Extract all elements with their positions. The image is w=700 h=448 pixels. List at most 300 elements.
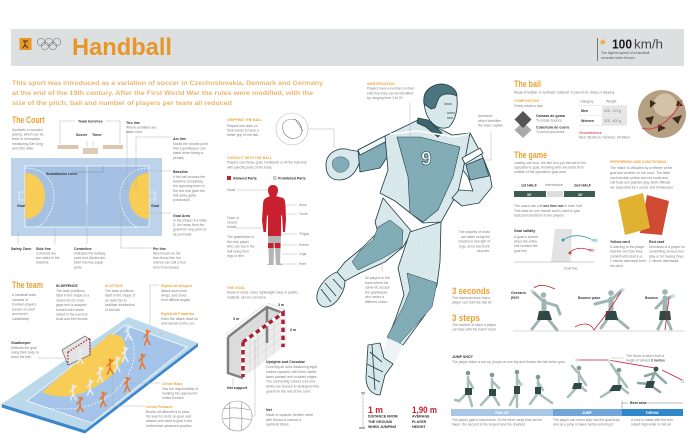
body labels: Head: [227, 188, 235, 192]
ball trajectory: The throw is taken from a: [626, 354, 664, 358]
in defence: formed with hands: [56, 308, 84, 312]
team labels: Right/Left Wingers: [161, 284, 192, 288]
goal validity: Goal validity: [514, 229, 535, 233]
ball illustration: [638, 90, 686, 138]
court labels: Centreline: [74, 247, 92, 251]
right arm with armband: [452, 133, 492, 206]
gripping the ball text: their hands to have a: [227, 129, 259, 133]
card descriptions: Dismissal of a player for: [649, 245, 686, 249]
game description: Lasting one hour, the aim is to put the ball in the: [514, 161, 586, 165]
card descriptions: play or for having three: [649, 254, 684, 258]
match timeline: [514, 183, 595, 197]
in attack: facilitate distribution: [105, 303, 135, 307]
team labels: Attack down both: [161, 289, 187, 293]
team labels: attacks with back to goal in the: [146, 419, 192, 423]
height stats: 1 m: [368, 405, 383, 416]
body labels: Legs: [299, 252, 307, 256]
body labels: the only player: [227, 240, 250, 244]
ball arm and hand: [326, 136, 392, 180]
in defence: raised in the event of: [56, 312, 88, 316]
court labels: stand when facing a: [173, 151, 203, 155]
phase captions: The player can never step into the goal area,: [553, 418, 620, 422]
goal labels: faces painted and rounded edges.: [266, 375, 317, 379]
card descriptions: [610, 240, 686, 268]
team benches and scorer table: Team benches: [78, 120, 103, 124]
best area marker: Best area: [630, 401, 647, 405]
identification: IDENTIFICATION: [367, 82, 395, 86]
composition: Cobertura de cuero: [536, 126, 570, 130]
goal validity: NO: [589, 248, 594, 252]
jump shot figures: [455, 364, 666, 407]
goal illustration: 3 m: [233, 317, 239, 321]
court labels: the one that gave the: [173, 189, 205, 193]
court labels: pitch into two equal: [74, 261, 103, 265]
court labels: point and divides the: [74, 256, 105, 260]
in defence: itself in the shape of a: [56, 294, 89, 298]
panel: three seconds and three steps: The maximum time that a: [452, 296, 490, 300]
weight table: 425 - 475 g: [604, 109, 621, 113]
team labels: the way for shots on goal, and: [146, 415, 191, 419]
team description: (seven on court: [12, 307, 35, 311]
weight table: 325 - 400 g: [604, 119, 621, 123]
game heading: The game: [514, 150, 547, 160]
body diagram: [262, 185, 286, 265]
contact with the ball text: [227, 156, 307, 169]
panel: the ball: [514, 79, 686, 140]
court labels: Arc line: [173, 137, 186, 141]
team benches and scorer table: Timer: [92, 133, 102, 137]
refereeing and sanctioning: The match is officiated by a referee at the: [610, 166, 672, 170]
court labels: Marks the closest point: [173, 142, 208, 146]
goal labels: Uprights and Crossbar: [266, 360, 306, 364]
panel: the team: [2, 280, 198, 434]
refereeing and sanctioning: are supported by a scorer and timekeeper.: [610, 186, 674, 190]
kit note: who wears a: [365, 295, 384, 299]
composition: Finely made to last: [514, 104, 543, 108]
intro paragraph: This sport was introduced as a variation of soccer in Czechoslovakia, Denmark and Germany: [12, 80, 324, 87]
court labels: goal from any point on: [173, 228, 207, 232]
composition: Camara de goma: [536, 114, 566, 118]
goal illustration: [225, 303, 296, 378]
speed stat: The highest speed of a handball: [601, 51, 650, 55]
bounce: [645, 289, 675, 330]
in defence: [56, 284, 89, 321]
phase captions: raised high while in mid air: [631, 422, 672, 426]
ball heading: The ball: [514, 79, 541, 89]
goal illustration: 3 m: [278, 303, 284, 307]
court labels: Where penalties are: [126, 126, 156, 130]
panel: passes: [511, 285, 684, 331]
team labels: Right/Left Fowardor: [161, 312, 195, 316]
right leg and shoe: [366, 222, 441, 395]
composition: [514, 99, 570, 138]
attackers: [77, 330, 150, 412]
court description: and 20m wide: [12, 146, 33, 150]
team labels: block the ball.: [11, 355, 32, 359]
kit note: same kit, accept: [365, 286, 390, 290]
phase bars: [451, 409, 683, 416]
net detail circle: [222, 401, 252, 431]
goal validity: Goal line: [564, 266, 577, 270]
bounce: Bounce: [645, 296, 658, 300]
ball description: Made of leather or synthetic material. It cannot be sticky or slippery.: [514, 90, 615, 94]
goal labels: Net: [266, 408, 273, 412]
goal labels: synthetic fibres: [266, 423, 289, 427]
overarm pass: Overarm: [511, 291, 526, 295]
in defence: gaps and is adapted: [56, 303, 87, 307]
body labels: legs or feet.: [227, 254, 245, 258]
phase captions: [452, 418, 673, 426]
court labels: Tiro line: [126, 121, 140, 125]
contact with the ball text: Players can throw, grab, hold/push or hit the ball only: [227, 160, 307, 164]
court labels: Indicates the halfway: [74, 252, 106, 256]
body labels: ball using their: [227, 249, 250, 253]
shots note: are taken using the: [461, 235, 490, 239]
kit note: team where the: [365, 281, 388, 285]
team benches and scorer table: Scorer: [76, 133, 88, 137]
goal labels: with thread of natural or: [266, 418, 302, 422]
goal labels: metres squared, with three visible: [266, 370, 317, 374]
match timeline: 1st HALF: [521, 184, 538, 188]
goal illustration: 2 m: [290, 328, 296, 332]
card descriptions: that the next foul they: [610, 250, 643, 254]
court labels: Safety Zone: [11, 247, 31, 251]
overarm pass: pass: [511, 296, 519, 300]
team labels: from difficult angles.: [161, 298, 191, 302]
refereeing and sanctioning: REFEREEING AND SANCTIONING: [610, 160, 667, 164]
height stats: 1,90 m: [412, 405, 437, 416]
goal validity: when the entire: [514, 240, 537, 244]
weight table: Men: [581, 109, 588, 113]
identification: [367, 82, 415, 100]
ball trajectory: height of almost 3 metres: [626, 359, 665, 363]
circumference: [579, 131, 630, 140]
team description: fourteen players: [12, 303, 37, 307]
in defence: IN DEFENCE: [56, 284, 78, 288]
in attack: of the ball.: [105, 308, 121, 312]
kit note: the goalkeeper: [365, 290, 388, 294]
court labels: taken from.: [126, 130, 143, 134]
circumference: Men: 58-60cm / Women: 54-56cm: [579, 136, 630, 140]
court labels: If the ball crosses the: [173, 175, 205, 179]
contact with the ball text: CONTACT WITH THE BALL: [227, 156, 273, 160]
heading: the team: The team: [12, 280, 43, 290]
runner 1: [455, 371, 473, 406]
goal labels: The contrasting colours (red and: [266, 380, 315, 384]
card descriptions: Yellow card: [610, 240, 630, 244]
panel: three seconds and three steps: can take with the ball in hand: [452, 328, 496, 332]
bounce pass: Bounce pass: [578, 296, 600, 300]
team labels: Centre Back: [162, 382, 182, 386]
court labels: Pin line: [153, 247, 166, 251]
height stats: [359, 393, 437, 429]
weight table: Women: [581, 119, 594, 123]
runner 4: [530, 375, 552, 404]
speed stat: 100: [612, 38, 632, 52]
refereeing and sanctioning: goal and another on the court. The latter: [610, 171, 671, 175]
phase bars: THROW: [645, 411, 659, 415]
phase captions: taken, the second is the longest and the shortest: [452, 422, 525, 426]
intro paragraph: [12, 80, 324, 107]
intro paragraph: size of the pitch, ball and number of players per team all reduced: [12, 100, 232, 107]
court labels: that a goalkeeper can: [173, 147, 206, 151]
kit note: different colour.: [365, 300, 388, 304]
height stats: THE GROUND: [368, 420, 393, 424]
identification: by, ranging from 1 to 20.: [367, 96, 404, 100]
gripping the ball text: Players use resin on: [227, 124, 258, 128]
game description: opposition's goal, throwing with one hand from: [514, 166, 584, 170]
title: Handball: [72, 34, 172, 61]
court labels: penalty: [173, 156, 184, 160]
panel: the goal: [222, 286, 319, 431]
body labels: who can touch the: [227, 245, 255, 249]
court labels: baseline: [36, 261, 49, 265]
jump shot text: JUMP SHOT: [452, 355, 474, 359]
shots note: muscles.: [477, 249, 490, 253]
phase bars: JUMP: [582, 411, 593, 415]
panel: three seconds and three steps: 3 seconds: [452, 286, 490, 296]
speed stat: [597, 36, 663, 61]
body labels: Arms: [299, 203, 307, 207]
court description: measuring 40m long: [12, 142, 43, 146]
body labels: Thighs: [299, 232, 309, 236]
court labels: possession.: [173, 198, 191, 202]
body labels: hands: [227, 225, 237, 229]
player annotations: [365, 82, 504, 304]
intro paragraph: at the end of the 19th century. After the First World War the rules were modified, with the: [12, 90, 314, 97]
team court diagram: [2, 317, 198, 434]
card descriptions: 2 minute dismissal from: [610, 259, 646, 263]
card descriptions: A warning to the player: [610, 245, 645, 249]
game description: outside of the opposition goal area: [514, 170, 566, 174]
gripping the ball text: [227, 118, 263, 137]
goal on team court: [62, 336, 90, 365]
body labels: Trunk: [299, 212, 308, 216]
in defence: fouls and free throws: [56, 317, 88, 321]
height stats: WHEN JUMPING: [368, 425, 397, 429]
team labels: Centre Forward: [146, 405, 172, 409]
team benches and scorer table: [58, 120, 123, 154]
in defence: The team positions: [56, 289, 85, 293]
legend: [227, 176, 306, 180]
body labels: [227, 188, 309, 266]
in attack: IN ATTACK: [105, 284, 124, 288]
overarm pass: [511, 285, 560, 330]
court diagram: Substitution Lines: [46, 172, 77, 176]
goal validity: [514, 229, 597, 270]
panel: the game: [514, 150, 686, 270]
court labels: referee can call a foul: [153, 261, 186, 265]
refereeing and sanctioning: [610, 160, 674, 190]
team description: A handball team: [12, 293, 36, 297]
match timeline: 30': [527, 193, 532, 197]
thrower: [638, 367, 666, 392]
team labels: using their body to: [11, 351, 39, 355]
jump shot text: [452, 355, 566, 364]
goal validity: YES: [591, 238, 597, 242]
time out: tactical instructions to the players.: [514, 214, 565, 218]
court description: paving, which can be: [12, 133, 44, 137]
card descriptions: commit will result in a: [610, 254, 642, 258]
time out: The coach can call one time out in each half.: [514, 204, 583, 208]
team labels: wings, and shoot: [161, 294, 187, 298]
left leg and shoe: [317, 198, 412, 307]
body labels: Feet: [299, 262, 306, 266]
jumper 1: [568, 366, 586, 397]
best area marker: [622, 401, 683, 409]
panel: three seconds and three steps: [452, 286, 497, 332]
card descriptions: the pitch.: [610, 264, 624, 268]
kit note: All players in the: [365, 276, 390, 280]
team labels: Goalkeeper: [11, 341, 31, 345]
bounce pass: [575, 288, 628, 330]
court labels: Connects the: [36, 252, 56, 256]
height stats: DISTANCE FROM: [368, 414, 398, 418]
player illustration: [317, 84, 492, 395]
court labels: D, 6m away from the: [173, 223, 204, 227]
court labels: [11, 121, 208, 269]
gripping the ball text: GRIPPING THE BALL: [227, 118, 263, 122]
panel: three seconds and three steps: The number of steps a player: [452, 323, 497, 327]
court labels: its perimeter.: [173, 232, 193, 236]
goal labels: goal from the rest of the court.: [266, 390, 311, 394]
height stats: HEIGHT: [412, 425, 426, 429]
panel: jump shot: [451, 354, 684, 426]
identification: shirt that they can be identified: [367, 91, 413, 95]
team labels: furthermost advanced position.: [146, 424, 192, 428]
team labels: Enter the attack head on: [161, 317, 198, 321]
court labels: the opposing team to: [173, 184, 205, 188]
team labels: Has the responsibility of: [162, 387, 198, 391]
panel: three seconds and three steps: player can hold the ball for: [452, 301, 493, 305]
card descriptions: Red card: [649, 240, 664, 244]
legend: Allowed Parts: [233, 176, 257, 180]
heading: the court: The Court: [12, 115, 44, 125]
phase captions: and as a jump is taken before entering it: [553, 422, 613, 426]
armband: Armband,: [478, 114, 493, 118]
in attack: itself in the shape of: [105, 294, 135, 298]
icon: handball pictogram: [20, 38, 32, 50]
court diagram: Goal: [17, 204, 25, 208]
defenders: [70, 325, 131, 400]
goal labels: Covering an area measuring eight: [266, 365, 317, 369]
team description: substitutes): [12, 317, 29, 321]
card descriptions: 2 minute dismissals: [649, 259, 679, 263]
body labels: closed: [227, 220, 237, 224]
team labels: and unload on the run.: [161, 322, 195, 326]
court labels: baseline completely,: [173, 180, 204, 184]
team labels: centre forward: [162, 396, 184, 400]
goal validity: goal line.: [514, 249, 528, 253]
runner 3: [510, 370, 524, 407]
court labels: Side line: [36, 247, 51, 251]
team description: and seven: [12, 312, 28, 316]
phase bars: RUN UP: [495, 411, 509, 415]
identification: Players have a number on their: [367, 86, 415, 90]
in defence: closed fan to cover: [56, 298, 85, 302]
goal labels: Made of squared, flexible mesh: [266, 413, 313, 417]
shirt: [380, 118, 478, 223]
goal heading: material, all non-corrosive.: [227, 295, 267, 299]
armband: which identifies: [478, 119, 501, 123]
goal validity: A goal is scored: [514, 235, 538, 239]
team labels: Blocks off defender's to pass: [146, 410, 189, 414]
team description: consists of: [12, 298, 28, 302]
refereeing and sanctioning: can brandish yellow and red cards and: [610, 176, 668, 180]
in attack: The team positions: [105, 289, 134, 293]
gripping the ball text: better grip of the ball.: [227, 133, 259, 137]
court labels: ball away gains: [173, 193, 196, 197]
goal labels: white) are chosen to distinguish the: [266, 385, 319, 389]
shots note: The majority of shots: [459, 230, 490, 234]
goal heading: Made of wood, steel, lightweight alloy or plastic: [227, 290, 298, 294]
panel: gripping and contact with the ball: [227, 113, 334, 266]
composition: COMPOSITION: [514, 99, 539, 103]
in attack: [105, 284, 135, 312]
composition: To avoid punctures: [536, 130, 565, 134]
armband: the team captain.: [478, 124, 504, 128]
refereeing and sanctioning: call fouls and passive play. Both officials: [610, 181, 670, 185]
shirt: 9: [421, 149, 432, 170]
court labels: here if necessary.: [153, 265, 180, 269]
court labels: Baseline: [173, 170, 188, 174]
court labels: parts.: [74, 265, 83, 269]
height stats: AVERAGE: [412, 414, 430, 418]
team labels: Defends the goal: [11, 346, 37, 350]
match timeline: Intermission: [545, 183, 563, 187]
legend: Prohibited Parts: [278, 176, 306, 180]
body labels: The goalkeeper is: [227, 235, 254, 239]
head: [424, 84, 457, 128]
icon: olympic rings: [37, 38, 61, 50]
ball trajectory: [575, 354, 684, 382]
goal labels: [227, 340, 319, 427]
panel: three seconds and three steps: 3 steps: [452, 313, 480, 323]
contact with the ball text: with specific parts of the body.: [227, 165, 272, 169]
match timeline: 2nd HALF: [574, 184, 592, 188]
speed stat: recorded when thrown.: [601, 56, 636, 60]
jumper 2: [601, 364, 628, 397]
phase captions: The player gain's momentum. Of the three steps that can be: [452, 418, 542, 422]
goal heading: THE GOAL: [227, 286, 246, 290]
court labels: two sides to the: [36, 256, 60, 260]
speed stat: km/h: [634, 38, 663, 52]
team labels: [11, 284, 198, 428]
goal heading: [227, 286, 298, 299]
goal labels: Net support: [227, 386, 248, 390]
court description: Synthetic or wooden: [12, 128, 43, 132]
card descriptions: committing serious foul: [649, 250, 684, 254]
court labels: Goal Area: [173, 214, 191, 218]
court diagram: Goal: [151, 204, 159, 208]
weight table: [579, 100, 627, 126]
court labels: free-throw line, the: [153, 256, 181, 260]
header band: [11, 29, 684, 66]
team labels: marking the opponent's: [162, 392, 197, 396]
weight table: Weight: [606, 100, 617, 104]
icon: hand grip circle: [276, 113, 334, 148]
court labels: Also known as the: [153, 252, 181, 256]
height stats: PLAYER: [412, 420, 427, 424]
shots note: legs, arms and trunk: [459, 244, 490, 248]
jump shot text: The player takes a run-up, jumps on one leg and throws the ball at the goal.: [452, 360, 566, 364]
body labels: Open or: [227, 216, 240, 220]
composition: To create bounce: [536, 118, 562, 122]
phase captions: A shot is made with the arm: [631, 418, 673, 422]
speed stat: *: [600, 36, 606, 52]
court description: fixed or removable,: [12, 137, 41, 141]
weight table: Category: [580, 100, 594, 104]
